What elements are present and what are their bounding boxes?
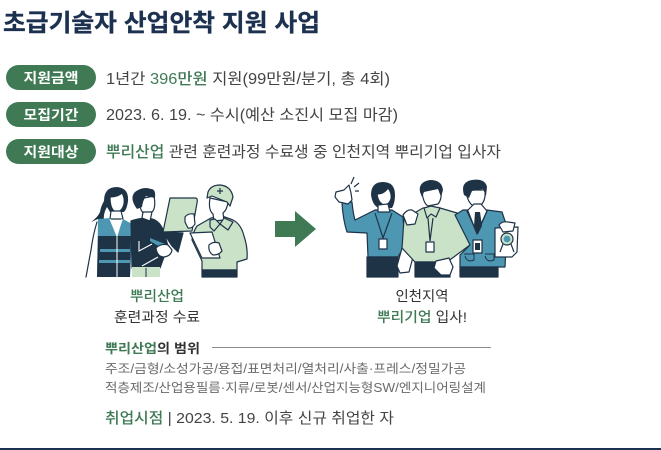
certificate: [495, 222, 518, 257]
badge: 모집기간: [6, 102, 96, 127]
caption: employment: 뿌리기업 입사!: [377, 309, 467, 325]
caption: training completion: [114, 288, 200, 325]
text: eligibility: 뿌리산업 관련 훈련과정 수료생 중 인천지역 뿌리기업 입사자: [106, 143, 501, 161]
illustration: hired workers: [335, 177, 518, 277]
badge: 모집기간: 모집기간: [24, 107, 79, 123]
caption: employment: 인천지역: [396, 288, 448, 304]
text: scope list: 주조/금형/소성가공/용접/표면처리/열처리/사출·프레스/정밀가공: [105, 362, 466, 376]
badge: 지원금액: [6, 65, 96, 90]
title: 초급기술자 산업안착 지원 사업: [3, 10, 320, 37]
caption: employment: [377, 288, 467, 325]
technician with short hair: [131, 188, 172, 277]
caption: training completion: 훈련과정 수료: [114, 309, 200, 325]
badge: 지원금액: 지원금액: [24, 70, 78, 86]
employee in suit: [455, 180, 507, 277]
handshake sleeve: [397, 248, 413, 273]
woman in safety vest: [86, 187, 132, 277]
illustration: trainees completing course: [86, 185, 247, 277]
tablet held up: [163, 198, 197, 252]
text: recruitment period: 2023. 6. 19. ~ 수시(예산 소진시 모집 마감): [106, 106, 398, 124]
text: scope list: [105, 362, 486, 395]
text: employment date: 취업시점 | 2023. 5. 19. 이후 신규 취업한 자: [105, 410, 394, 427]
section heading: scope of root industries: 뿌리산업 의 범위: [105, 341, 200, 356]
badge: 지원대상: [6, 139, 96, 164]
badge: 지원대상: 지원대상: [24, 144, 79, 160]
bottom bar: [0, 448, 661, 450]
text: scope list: 적층제조/산업용필름·지류/로봇/센서/산업지능형SW/엔지니어링설계: [105, 381, 486, 395]
info row: 모집기간: [6, 102, 398, 127]
info row: 지원금액: [6, 65, 390, 90]
employee in green shirt: [402, 180, 470, 277]
caption: training completion: 뿌리산업: [130, 288, 184, 304]
worker with hard hat: [190, 185, 247, 277]
info row: 지원대상: [6, 139, 501, 164]
arrow: [275, 211, 316, 247]
text: support amount: 1년간 396만원 지원(99만원/분기, 총 4회): [106, 70, 390, 88]
employee with thumbs up: [335, 177, 405, 277]
